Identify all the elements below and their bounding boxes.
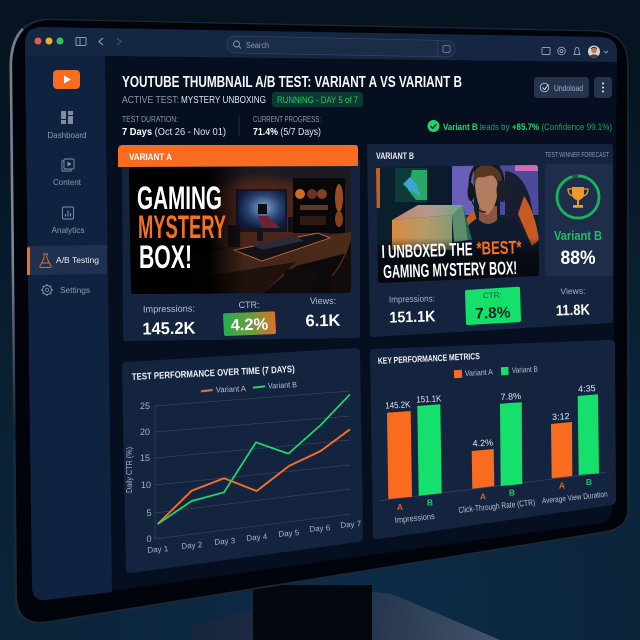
sidebar navigation	[27, 70, 107, 296]
panel: variant B	[367, 144, 613, 337]
search bar: Search	[246, 41, 269, 50]
x axis labels: Day 3	[214, 536, 236, 547]
bars: impressions: A	[397, 502, 403, 512]
neon sign	[395, 168, 427, 202]
nav item: content	[53, 159, 82, 187]
bars: click-through rate: B	[509, 488, 515, 498]
views A: Views:	[310, 296, 336, 306]
nav item: content: Content	[53, 177, 82, 187]
line: variant A	[158, 429, 350, 524]
winner forecast: 88%	[560, 248, 596, 269]
test duration: TEST DURATION:	[122, 115, 178, 124]
CTR B: 7.8%	[475, 304, 511, 323]
sidebar	[25, 55, 112, 600]
y axis labels: 5	[146, 508, 152, 518]
mystery box	[392, 205, 463, 220]
PC tower	[293, 178, 345, 233]
bars: click-through rate	[458, 391, 536, 515]
bars: click-through rate: Click-Through Rate (CTR)	[458, 497, 536, 515]
y axis title: Daily CTR (%)	[125, 447, 134, 493]
stand base	[190, 592, 500, 640]
bars: impressions: 151.1K	[416, 393, 442, 405]
icon: sidebar toggle	[76, 38, 86, 46]
impressions B: Impressions:	[389, 293, 435, 305]
chart legend: Variant A	[216, 384, 247, 394]
metrics title: KEY PERFORMANCE METRICS	[378, 351, 480, 366]
panel header	[376, 151, 610, 161]
left fade	[129, 167, 243, 294]
CTR B: CTR:	[483, 291, 502, 300]
thumbnail B	[376, 163, 539, 283]
y axis labels: 15	[140, 453, 150, 463]
left silver highlight	[10, 28, 24, 440]
status badge: RUNNING - DAY 5 of 7	[277, 95, 358, 106]
stand neck	[253, 585, 372, 640]
metrics legend: Variant A	[465, 368, 494, 378]
panel body	[370, 340, 616, 539]
views B: 11.8K	[556, 302, 590, 319]
desktop monitor	[236, 189, 287, 232]
monitor stand	[190, 585, 500, 640]
thumbnail B headline	[382, 240, 522, 278]
panel header: TEST WINNER FORECAST	[545, 152, 610, 159]
impressions B: 151.1K	[389, 308, 436, 327]
thumbnail B headline: I UNBOXED THE	[381, 238, 473, 262]
headset	[468, 166, 504, 186]
views B	[556, 286, 590, 319]
icon: back arrow	[99, 38, 103, 45]
panel header	[118, 145, 358, 167]
nav item: analytics: Analytics	[52, 225, 84, 235]
views A	[305, 296, 341, 330]
bars: average view duration: 3:12	[552, 411, 570, 422]
x axis labels: Day 2	[181, 540, 203, 551]
bars: average view duration: B	[586, 477, 592, 487]
chart gridlines	[155, 391, 350, 540]
undoload button: Undoload	[554, 83, 583, 93]
test duration: 7 Days (Oct 26 - Nov 01)	[122, 127, 226, 138]
stats A	[142, 296, 341, 338]
icon: forward arrow	[117, 38, 121, 45]
metrics legend: Variant B	[512, 365, 538, 375]
nav item: A/B testing active	[27, 245, 107, 275]
bars: impressions	[385, 393, 442, 525]
active test subtitle: MYSTERY UNBOXING	[181, 95, 266, 106]
chart legend: Variant B	[268, 380, 297, 390]
y axis labels: 20	[140, 427, 150, 437]
y axis labels: 0	[146, 534, 152, 544]
views A: 6.1K	[305, 312, 341, 330]
y axis labels: 10	[141, 480, 151, 490]
thumbnail B headline: *BEST*	[476, 236, 522, 259]
baseline	[380, 472, 606, 501]
chart title: TEST PERFORMANCE OVER TIME (7 DAYS)	[132, 364, 295, 383]
bars: impressions: 145.2K	[385, 399, 411, 411]
panel: key performance metrics	[370, 340, 616, 539]
impressions A: Impressions:	[143, 304, 195, 315]
winner forecast: Variant B	[554, 228, 602, 243]
bars: average view duration: A	[559, 480, 565, 490]
panel: test performance line chart	[122, 348, 363, 573]
thumbnail A headline: MYSTERY	[138, 209, 226, 245]
man torso	[468, 217, 526, 240]
current progress: CURRENT PROGRESS:	[253, 115, 321, 124]
room background	[376, 166, 538, 249]
man hair	[473, 165, 502, 186]
x axis labels: Day 7	[340, 519, 362, 530]
x axis labels: Day 4	[246, 532, 268, 543]
metrics legend	[454, 365, 538, 378]
panel header: VARIANT A	[129, 152, 172, 163]
impressions B	[389, 293, 436, 327]
icon: trophy	[568, 187, 588, 208]
man face	[475, 174, 498, 215]
top right icons	[542, 47, 608, 55]
keyboard and mat	[234, 233, 330, 261]
nav item: settings: Settings	[60, 285, 90, 295]
speakers	[228, 225, 240, 247]
nav item: dashboard	[48, 111, 87, 140]
progress ring	[557, 176, 599, 218]
impressions A: 145.2K	[142, 319, 196, 338]
y axis labels: 25	[140, 401, 150, 411]
test duration	[122, 115, 226, 138]
bars: average view duration: 4:35	[578, 383, 596, 394]
x axis labels	[147, 519, 362, 555]
icon: play logo	[53, 70, 80, 89]
bars: average view duration: Average View Duration	[541, 490, 608, 505]
window buttons	[34, 38, 64, 44]
thumbnail A headline: GAMING	[137, 180, 222, 216]
active test subtitle: ACTIVE TEST:	[122, 95, 179, 106]
thumbnail A headline	[138, 186, 226, 268]
chart legend	[201, 380, 297, 394]
bars: click-through rate: 4.2%	[472, 437, 493, 449]
nav item: A/B testing active: A/B Testing	[56, 255, 99, 265]
gaming chair	[505, 171, 534, 240]
title: YOUTUBE THUMBNAIL A/B TEST: VARIANT A VS VARIANT B	[122, 74, 462, 91]
current progress	[239, 115, 321, 138]
status badge	[272, 92, 363, 107]
impressions A	[142, 304, 196, 338]
panel body	[367, 144, 613, 337]
search bar	[227, 36, 455, 57]
nav item: analytics	[52, 207, 84, 235]
menu button	[594, 77, 612, 98]
panel body	[122, 348, 363, 573]
x axis labels: Day 6	[309, 523, 331, 534]
undoload button	[534, 77, 589, 98]
CTR A	[223, 300, 276, 336]
stats B	[389, 286, 590, 327]
bars: impressions: Impressions	[394, 511, 435, 525]
y axis labels	[140, 401, 152, 544]
lower shade	[376, 238, 539, 283]
thumbnail A	[129, 167, 351, 294]
x axis labels: Day 5	[278, 528, 300, 539]
winner forecast	[545, 164, 613, 276]
nav item: settings	[41, 284, 90, 296]
active test subtitle	[122, 95, 266, 106]
current progress: 71.4% (5/7 Days)	[253, 127, 321, 138]
top bar controls	[34, 36, 608, 58]
bars: average view duration	[541, 383, 608, 505]
CTR B	[465, 287, 521, 325]
user avatar	[588, 46, 600, 58]
bars: click-through rate: 7.8%	[500, 391, 521, 402]
views B: Views:	[560, 286, 585, 296]
bars: impressions: B	[427, 498, 433, 508]
panel: variant A	[118, 145, 360, 341]
chair	[283, 268, 293, 276]
thumbnail B headline: GAMING MYSTERY BOX!	[383, 257, 517, 282]
panel header: VARIANT B	[376, 151, 414, 161]
CTR A: 4.2%	[230, 315, 269, 334]
CTR A: CTR:	[238, 300, 260, 310]
man neck	[479, 206, 497, 224]
nav item: dashboard: Dashboard	[48, 130, 87, 140]
x axis labels: Day 1	[147, 544, 169, 555]
desk	[190, 232, 351, 294]
line: variant B	[158, 394, 350, 524]
bars: click-through rate: A	[480, 492, 486, 502]
top bar	[25, 27, 617, 62]
leader callout: Variant B leads by +85.7% (Confidence 99.1%)	[443, 122, 612, 133]
panel body	[122, 160, 360, 341]
thumbnail A headline: BOX!	[139, 239, 192, 275]
